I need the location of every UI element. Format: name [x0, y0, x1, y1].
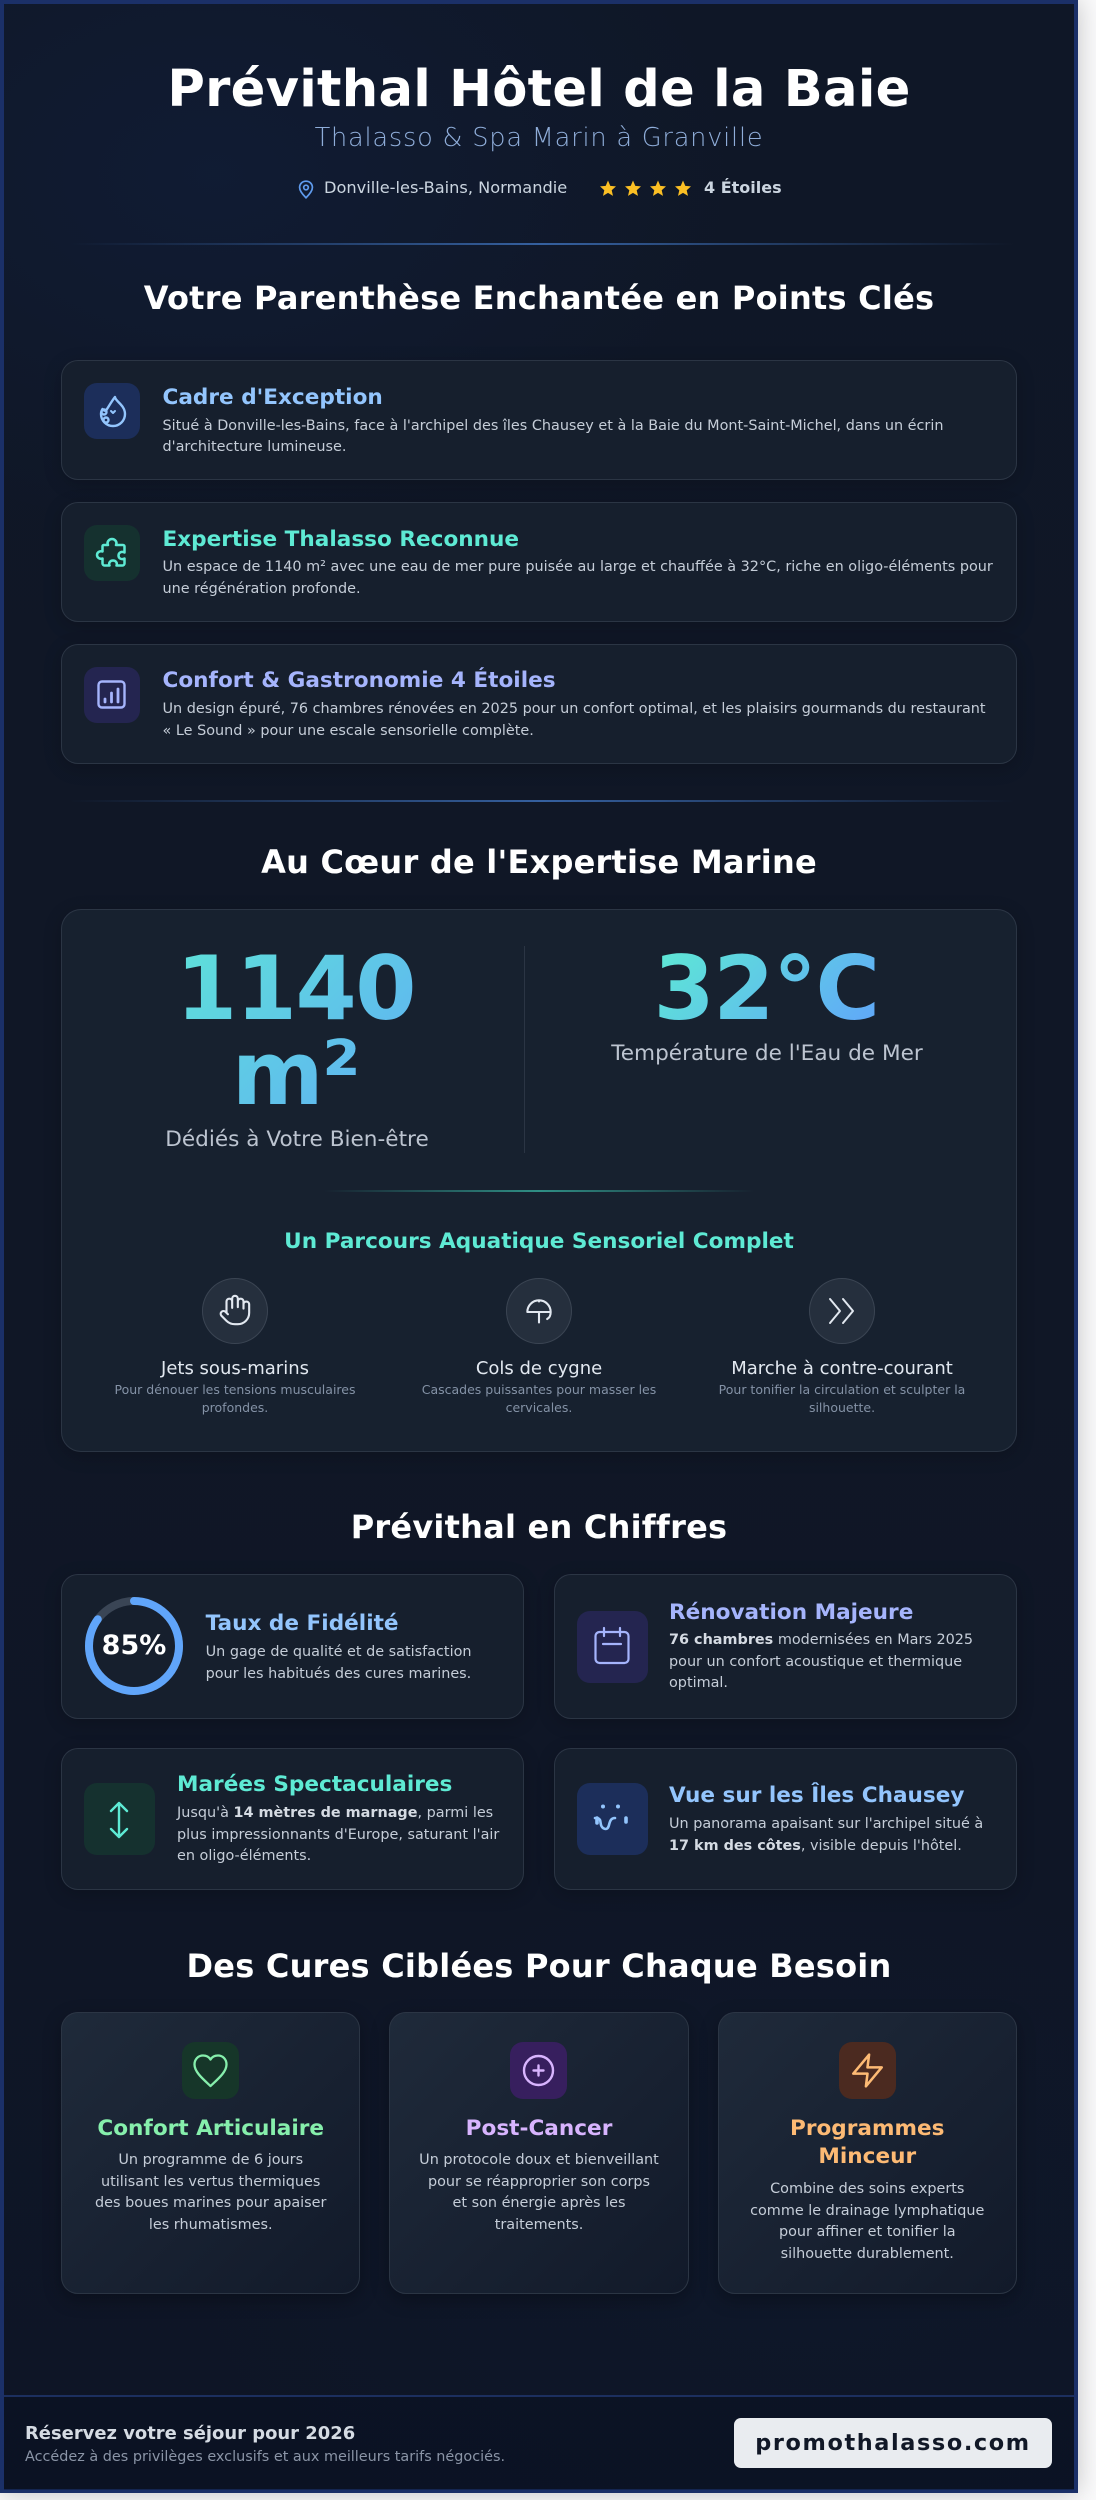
card description: Un espace de 1140 m² avec une eau de mer pure puisée au large et chauffée à 32°C, riche en oligo-éléments pour	[162, 559, 993, 575]
stat label: surface: Dédiés à Votre Bien-être	[165, 1127, 429, 1152]
cure description: Un programme de 6 jours	[118, 2152, 303, 2168]
card description	[669, 1816, 983, 1854]
card description: Un gage de qualité et de satisfaction	[206, 1644, 472, 1660]
cure description: comme le drainage lymphatique	[750, 2203, 984, 2219]
feature: cols de cygne	[422, 1278, 656, 1415]
cure description	[419, 2152, 659, 2233]
card description: en oligo-éléments.	[177, 1848, 311, 1864]
cure title: Confort Articulaire	[97, 2116, 324, 2141]
cure title	[790, 2116, 944, 2169]
cure card: minceur	[718, 2012, 1017, 2294]
card title: Vue sur les Îles Chausey	[669, 1783, 964, 1808]
panel: expertise marine	[61, 909, 1017, 1452]
cure description: les rhumatismes.	[149, 2217, 273, 2233]
stat: temperature: 32°C	[653, 937, 879, 1040]
card title: Cadre d'Exception	[162, 384, 383, 410]
cure description: pour se réapproprier son corps	[428, 2174, 650, 2190]
cure description: pour affiner et tonifier la	[779, 2224, 956, 2240]
stat card: renovation	[554, 1574, 1017, 1719]
card description: d'architecture lumineuse.	[162, 439, 346, 455]
card title: Marées Spectaculaires	[177, 1772, 452, 1797]
feature description: Pour dénouer les tensions musculaires	[114, 1382, 355, 1396]
feature: marche	[719, 1278, 965, 1415]
cure description: utilisant les vertus thermiques	[101, 2174, 320, 2190]
cure title: Minceur	[818, 2144, 916, 2169]
cure description	[750, 2181, 984, 2262]
icon: plus circle	[510, 2042, 567, 2099]
heading: expertise marine: Au Cœur de l'Expertise Marine	[261, 842, 817, 880]
heading: cures: Des Cures Ciblées Pour Chaque Besoin	[186, 1946, 892, 1984]
icon: double chevron	[809, 1278, 875, 1344]
feature description: profondes.	[202, 1400, 268, 1415]
rating text: 4 Étoiles	[704, 178, 782, 197]
stat: surface	[96, 946, 496, 1117]
stat card: tides	[61, 1748, 524, 1890]
card description	[162, 701, 986, 739]
card description: 17 km des côtes, visible depuis l'hôtel.	[669, 1838, 962, 1854]
card description	[162, 559, 993, 597]
location and rating row	[298, 178, 782, 199]
card title: Expertise Thalasso Reconnue	[162, 526, 519, 552]
cure description	[95, 2152, 326, 2233]
cure description: traitements.	[495, 2217, 583, 2233]
call to action button	[734, 2418, 1052, 2468]
call to action button: promothalasso.com	[755, 2430, 1031, 2456]
cure description: Un protocole doux et bienveillant	[419, 2152, 659, 2168]
card title: Confort & Gastronomie 4 Étoiles	[162, 668, 556, 693]
heading: points clés: Votre Parenthèse Enchantée en Points Clés	[144, 279, 934, 317]
icon: location pin	[298, 180, 314, 199]
location text: Donville-les-Bains, Normandie	[324, 178, 567, 197]
card description: Jusqu'à 14 mètres de marnage, parmi les	[177, 1805, 493, 1821]
cure title: Post-Cancer	[466, 2116, 612, 2141]
feature description	[719, 1382, 965, 1415]
card description: Situé à Donville-les-Bains, face à l'archipel des îles Chausey et à la Baie du Mont-Saint-Michel, dans un écrin	[162, 418, 943, 434]
icon: up down arrow	[84, 1783, 155, 1855]
feature name: Cols de cygne	[476, 1358, 602, 1378]
card description	[176, 1805, 500, 1864]
footer	[4, 2395, 1074, 2490]
card description	[206, 1644, 472, 1682]
card description: une régénération profonde.	[162, 581, 361, 597]
stat label: temperature: Température de l'Eau de Mer	[611, 1041, 923, 1066]
card description: pour un confort acoustique et thermique	[669, 1654, 962, 1670]
heading: chiffres: Prévithal en Chiffres	[351, 1508, 727, 1546]
feature description	[114, 1382, 355, 1415]
card: cadre d'exception	[61, 360, 1017, 480]
card description: 76 chambres modernisées en Mars 2025	[669, 1632, 973, 1648]
cure description: Combine des soins experts	[770, 2181, 964, 2197]
card: confort et gastronomie	[61, 644, 1017, 764]
icon: heart	[182, 2042, 239, 2099]
icon: water drop	[84, 383, 140, 439]
feature description: Cascades puissantes pour masser les	[422, 1382, 656, 1396]
card description: Un design épuré, 76 chambres rénovées en 2025 pour un confort optimal, et les plaisirs gourmands du restaurant	[162, 701, 986, 717]
card description: « Le Sound » pour une escale sensorielle complète.	[162, 723, 534, 739]
feature description: silhouette.	[809, 1400, 875, 1415]
feature description: cervicales.	[506, 1400, 572, 1415]
card: expertise thalasso	[61, 502, 1017, 622]
footer text: Accédez à des privilèges exclusifs et aux meilleurs tarifs négociés.	[25, 2449, 505, 2465]
icon: hand	[202, 1278, 268, 1344]
feature: jets	[114, 1278, 355, 1415]
donut chart: 85%	[85, 1597, 183, 1695]
cure title: Programmes	[790, 2116, 944, 2141]
parcours heading: Un Parcours Aquatique Sensoriel Complet	[284, 1228, 794, 1254]
card description	[162, 418, 943, 455]
star rating icons	[600, 180, 691, 196]
card description: pour les habitués des cures marines.	[206, 1666, 471, 1682]
cure description: et son énergie après les	[453, 2195, 625, 2211]
cure description: silhouette durablement.	[781, 2246, 954, 2262]
icon: lightning bolt	[839, 2042, 896, 2099]
card description	[669, 1632, 973, 1691]
feature description	[422, 1382, 656, 1415]
cure description: des boues marines pour apaiser	[95, 2195, 326, 2211]
icon: chart	[84, 667, 140, 723]
donut value: 85%	[102, 1630, 166, 1661]
icon: calendar	[577, 1611, 648, 1683]
subtitle: Thalasso & Spa Marin à Granville	[315, 123, 763, 153]
feature name: Marche à contre-courant	[731, 1358, 953, 1378]
icon: puzzle	[84, 525, 140, 581]
card title: Taux de Fidélité	[206, 1611, 399, 1636]
footer heading: Réservez votre séjour pour 2026	[25, 2423, 355, 2444]
cure card: articulaire	[61, 2012, 360, 2294]
card description: Un panorama apaisant sur l'archipel situé à	[669, 1816, 983, 1832]
feature description: Pour tonifier la circulation et sculpter la	[719, 1382, 965, 1396]
card title: Rénovation Majeure	[669, 1600, 913, 1625]
feature name: Jets sous-marins	[161, 1358, 309, 1378]
title: Prévithal Hôtel de la Baie	[167, 59, 911, 119]
card description: plus impressionnants d'Europe, saturant l'air	[177, 1827, 499, 1843]
card description: optimal.	[669, 1675, 728, 1691]
cure card: post-cancer	[389, 2012, 689, 2294]
stat card: fidelity	[61, 1574, 524, 1719]
stat card: islands view	[554, 1748, 1017, 1890]
stat: surface: 1140	[176, 937, 415, 1040]
icon: waves	[577, 1783, 648, 1855]
icon: umbrella	[506, 1278, 572, 1344]
stat: surface: m²	[232, 1022, 359, 1125]
